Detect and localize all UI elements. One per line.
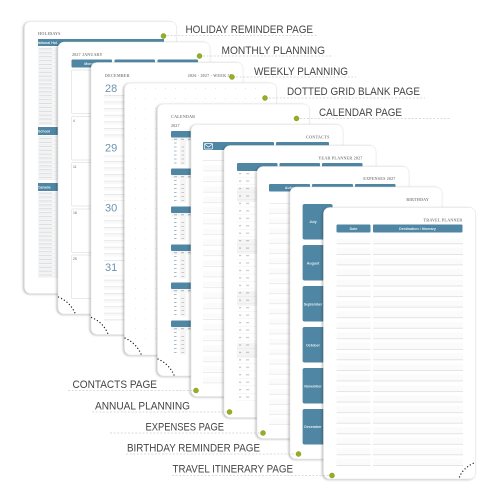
- weekly page title: DECEMBER: [105, 73, 130, 78]
- page: expenses: [257, 166, 409, 438]
- expenses tabs: Auto: [285, 186, 294, 190]
- weekly range label: 2026 - 2027 - WEEK 53: [188, 73, 232, 78]
- marker: calendar: [294, 116, 299, 121]
- marker: holiday: [161, 34, 166, 38]
- calendar page title: CALENDAR: [171, 114, 195, 119]
- holiday page title: HOLIDAYS: [38, 31, 61, 36]
- birthday month blocks: November: [304, 384, 322, 388]
- contacts page title: CONTACTS: [306, 134, 330, 140]
- holiday list: school: [38, 136, 58, 180]
- holiday header: school: [38, 127, 58, 135]
- holiday list: national: [38, 47, 58, 125]
- corner perforation arc: [460, 463, 474, 477]
- marker: monthly: [197, 54, 202, 58]
- birthday month blocks: December: [304, 425, 322, 429]
- annual weekend shading: [237, 187, 257, 358]
- marker: weekly: [230, 74, 234, 80]
- icon: envelope: [204, 144, 212, 149]
- corner perforation arc: [58, 297, 75, 313]
- weekly dates: 28: [105, 83, 117, 95]
- birthday month blocks: August: [307, 262, 320, 266]
- page: calendar: [158, 104, 310, 376]
- contacts tabs: [203, 142, 329, 150]
- weekly dates: 31: [105, 262, 117, 274]
- label: dotted grid blank page: DOTTED GRID BLANK PAGE: [287, 86, 420, 98]
- monthly dates: 25: [73, 257, 77, 261]
- corner perforation arc: [92, 318, 108, 334]
- label: annual planning: ANNUAL PLANNING: [95, 400, 190, 412]
- annual month tabs: [237, 163, 362, 171]
- holiday header: canada: Canada: [38, 186, 51, 190]
- label: expenses page: EXPENSES PAGE: [146, 422, 224, 434]
- weekly dates: 30: [105, 202, 117, 214]
- page: weekly planning: [91, 62, 243, 334]
- green marker: [227, 410, 232, 414]
- monthly dates: 4: [73, 119, 75, 123]
- label: holiday reminder page: HOLIDAY REMINDER PAGE: [186, 24, 313, 36]
- monthly page title: 2027 JANUARY: [72, 52, 103, 57]
- calendar month blocks: [171, 131, 192, 354]
- page: dotted grid: [124, 83, 276, 355]
- weekly rule lines: [104, 95, 125, 321]
- contacts lines: [203, 160, 225, 385]
- annual day rows: [237, 172, 257, 403]
- holiday list: canada: [38, 192, 58, 278]
- travel column headers: [336, 224, 462, 232]
- travel rows: [336, 239, 463, 466]
- monthly day tabs: [72, 60, 198, 68]
- corner perforation arc: [125, 338, 141, 354]
- green marker: [296, 452, 301, 456]
- monthly day tabs: Monday: [84, 62, 98, 66]
- travel column headers: Date: [350, 227, 357, 231]
- page: contacts: [191, 124, 343, 396]
- monthly dates: 18: [73, 211, 77, 215]
- birthday month blocks: [303, 204, 333, 444]
- expenses page title: EXPENSES 2027: [363, 176, 396, 181]
- monthly dates: 11: [73, 165, 77, 169]
- monthly dates: [73, 119, 77, 261]
- page: annual planning: [224, 146, 376, 418]
- birthday month blocks: October: [306, 344, 320, 348]
- weekly dates: 29: [105, 142, 117, 154]
- weekly dates: [105, 83, 117, 274]
- label: birthday reminder page: BIRTHDAY REMINDER PAGE: [127, 442, 260, 454]
- expenses lines: [269, 203, 291, 425]
- holiday header: canada: [38, 183, 58, 191]
- label: monthly planning: MONTHLY PLANNING: [222, 45, 325, 57]
- monthly week cells: [72, 70, 112, 298]
- birthday page title: BIRTHDAY: [406, 197, 429, 202]
- travel column headers: Destination / Itinerary: [399, 227, 436, 231]
- green marker: [260, 430, 266, 436]
- holiday header bar: National Hol.: [36, 41, 58, 45]
- marker: dotted grid: [262, 96, 268, 100]
- leader lines: [68, 36, 450, 476]
- label: travel itinerary page: TRAVEL ITINERARY PAGE: [172, 464, 293, 476]
- page: travel itinerary: [324, 208, 476, 479]
- page: holiday reminder: [24, 22, 176, 294]
- birthday month blocks: July: [309, 220, 317, 224]
- expenses tabs: [269, 184, 396, 192]
- travel page title: TRAVEL PLANNER: [423, 218, 462, 222]
- label: contacts page: CONTACTS PAGE: [72, 379, 157, 391]
- green marker: [194, 388, 198, 393]
- page: monthly planning: [58, 42, 210, 314]
- green marker: [330, 473, 334, 478]
- holiday header: school: School: [38, 130, 50, 134]
- label: weekly planning: WEEKLY PLANNING: [254, 66, 348, 78]
- label: calendar page: CALENDAR PAGE: [319, 107, 402, 119]
- birthday month blocks: September: [304, 302, 323, 306]
- calendar year: 2027: [171, 123, 180, 128]
- holiday header bar: [36, 39, 164, 46]
- dot grid: [134, 88, 264, 348]
- corner perforation arc: [158, 359, 174, 375]
- page: birthday reminder: [290, 187, 442, 459]
- annual page title: YEAR PLANNER 2027: [318, 156, 362, 160]
